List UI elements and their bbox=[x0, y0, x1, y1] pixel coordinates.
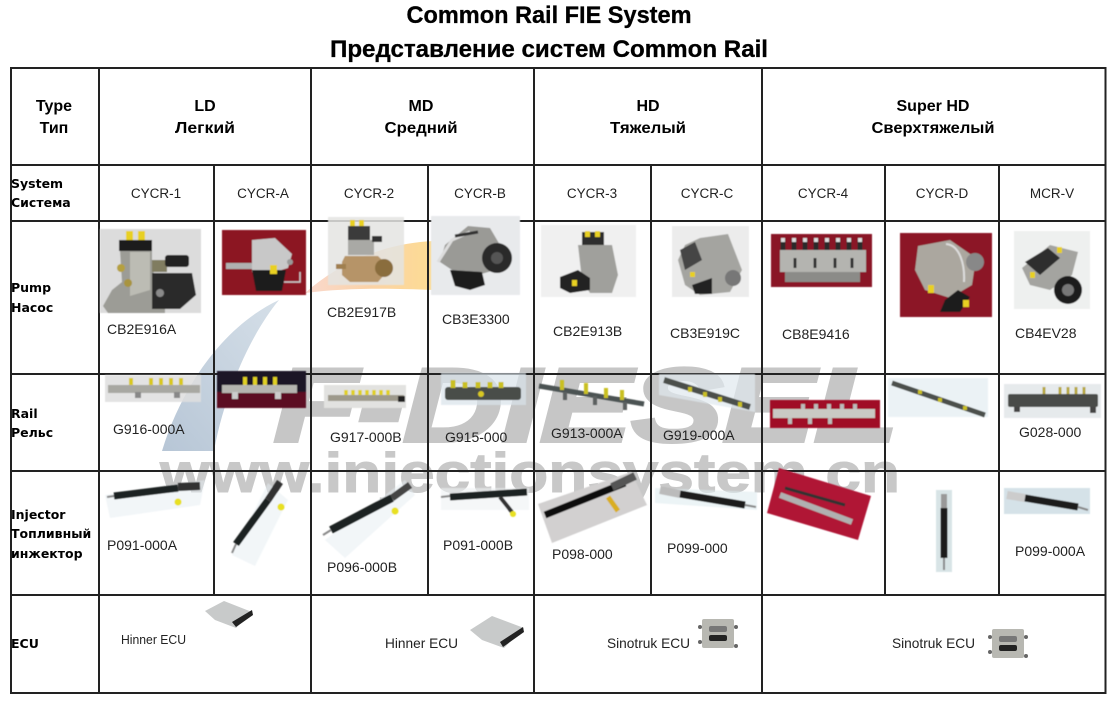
watermark: F-Diesel logo: www.injectionsystem.cn bbox=[159, 441, 900, 504]
row labels: Рельс bbox=[11, 425, 53, 440]
rail: G916-000A bbox=[105, 375, 201, 402]
rail part numbers: G916-000A bbox=[113, 421, 185, 437]
title: Представление систем Common Rail bbox=[330, 36, 768, 63]
injector: P091-000B bbox=[441, 488, 529, 517]
title: Common Rail FIE System bbox=[406, 2, 692, 29]
header row: Легкий bbox=[175, 120, 235, 137]
pump: CB4EV28 bbox=[1014, 231, 1090, 309]
rail: CYCR-D bbox=[888, 378, 988, 417]
injector part numbers: P096-000B bbox=[327, 559, 397, 575]
ECU: Super HD bbox=[892, 629, 1028, 658]
rail part numbers: G028-000 bbox=[1019, 424, 1081, 440]
watermark: F-Diesel logo: F-DIESEL bbox=[274, 348, 898, 464]
system row: Система bbox=[11, 195, 71, 210]
injector: P096-000B bbox=[323, 480, 415, 558]
pump: CB3E919C bbox=[672, 226, 749, 297]
pump part numbers: CB2E917B bbox=[327, 304, 396, 320]
row labels: Насос bbox=[11, 300, 53, 315]
injector: CYCR-A bbox=[232, 482, 288, 566]
injector: P091-000A bbox=[105, 480, 205, 518]
injector part numbers bbox=[107, 537, 1086, 575]
system row: CYCR-A bbox=[237, 186, 289, 201]
injector: P099-000A bbox=[1004, 488, 1090, 514]
pump: CYCR-D bbox=[900, 233, 992, 317]
system row: CYCR-2 bbox=[344, 186, 394, 201]
pump: CB8E9416 bbox=[771, 234, 872, 287]
ECU: MD bbox=[385, 616, 524, 651]
rail: G913-000A bbox=[539, 380, 644, 410]
pump: CB3E3300 bbox=[431, 216, 520, 295]
pump part numbers: CB2E913B bbox=[553, 323, 622, 339]
row labels: Rail bbox=[11, 406, 38, 421]
injector part numbers: P099-000 bbox=[667, 540, 728, 556]
row labels: Pump bbox=[11, 280, 51, 295]
system row: CYCR-3 bbox=[567, 186, 617, 201]
header row bbox=[36, 98, 994, 137]
system row: CYCR-4 bbox=[798, 186, 849, 201]
pump: CYCR-A bbox=[222, 230, 306, 295]
header row: Type bbox=[36, 98, 72, 115]
rail: G919-000A bbox=[659, 374, 755, 412]
system row: CYCR-1 bbox=[131, 186, 181, 201]
header row: HD bbox=[636, 98, 660, 115]
system row: CYCR-B bbox=[454, 186, 506, 201]
ECU: LD: Hinner ECU bbox=[121, 633, 186, 647]
header row: LD bbox=[194, 98, 216, 115]
injector part numbers: P091-000A bbox=[107, 537, 178, 553]
pump: CB2E916A bbox=[100, 229, 201, 313]
rail: CYCR-4 bbox=[770, 400, 880, 428]
injector: P099-000 bbox=[655, 488, 757, 510]
row labels bbox=[11, 280, 91, 651]
rail part numbers: G919-000A bbox=[663, 427, 735, 443]
header row: Средний bbox=[384, 120, 458, 137]
header row: Тип bbox=[40, 120, 68, 137]
row labels: Injector bbox=[11, 507, 66, 522]
injector: CYCR-D bbox=[936, 490, 952, 572]
header row: MD bbox=[409, 98, 433, 115]
pump part numbers: CB4EV28 bbox=[1015, 325, 1077, 341]
pump: CB2E913B bbox=[541, 225, 636, 297]
rail: CYCR-A bbox=[217, 371, 306, 408]
injector: P098-000 bbox=[538, 472, 647, 543]
system row bbox=[11, 176, 1074, 210]
row labels: Топливный bbox=[11, 526, 91, 541]
header row: Тяжелый bbox=[610, 120, 686, 137]
injector part numbers: P098-000 bbox=[552, 546, 613, 562]
injector part numbers: P091-000B bbox=[443, 537, 513, 553]
system row: System bbox=[11, 176, 63, 191]
ECU: HD bbox=[607, 619, 738, 651]
rail part numbers: G915-000 bbox=[445, 429, 507, 445]
injector part numbers: P099-000A bbox=[1015, 543, 1086, 559]
rail part numbers: G917-000B bbox=[330, 429, 402, 445]
injector: CYCR-4 bbox=[767, 468, 871, 540]
header row: Super HD bbox=[896, 98, 970, 115]
pump part numbers bbox=[107, 304, 1077, 342]
ECU: MD: Hinner ECU bbox=[385, 635, 458, 651]
rail: G917-000B bbox=[324, 385, 406, 408]
rail part numbers bbox=[113, 421, 1081, 445]
title bbox=[330, 2, 768, 63]
pump: CB2E917B bbox=[328, 217, 404, 285]
ECU: LD bbox=[121, 601, 253, 647]
header row: Сверхтяжелый bbox=[872, 120, 994, 137]
rail: G915-000 bbox=[441, 373, 526, 405]
system row: CYCR-C bbox=[681, 186, 733, 201]
row labels: ECU bbox=[11, 636, 39, 651]
pump part numbers: CB8E9416 bbox=[782, 326, 850, 342]
watermark: F-Diesel logo bbox=[159, 241, 900, 504]
rail part numbers: G913-000A bbox=[551, 425, 623, 441]
ECU: HD: Sinotruk ECU bbox=[607, 635, 690, 651]
ECU: Super HD: Sinotruk ECU bbox=[892, 635, 975, 651]
pump part numbers: CB2E916A bbox=[107, 321, 177, 337]
rail: G028-000 bbox=[1004, 384, 1101, 418]
row labels: инжектор bbox=[11, 546, 83, 561]
system row: MCR-V bbox=[1030, 186, 1074, 201]
pump part numbers: CB3E3300 bbox=[442, 311, 510, 327]
system row: CYCR-D bbox=[916, 186, 968, 201]
pump part numbers: CB3E919C bbox=[670, 325, 740, 341]
